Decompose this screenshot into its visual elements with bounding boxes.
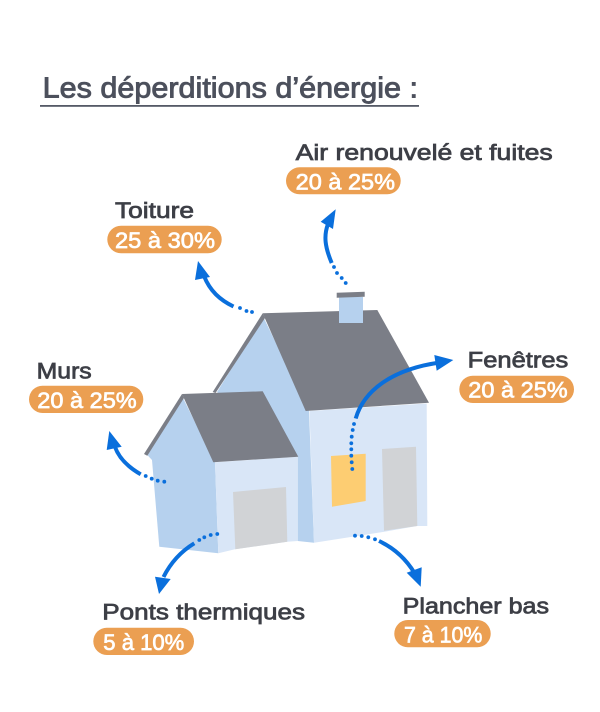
window xyxy=(331,454,366,507)
main house roof edge xyxy=(213,313,265,393)
house illustration xyxy=(144,292,429,553)
annex door xyxy=(233,487,287,549)
main house gable wall xyxy=(217,317,314,543)
arrow: plancher bas xyxy=(353,534,422,587)
arrow: air renouvelé xyxy=(321,209,348,285)
chimney xyxy=(337,292,365,323)
title: Les déperditions d’énergie : xyxy=(43,72,418,104)
main house door xyxy=(382,447,417,531)
label: murs: Murs xyxy=(37,358,92,383)
label: ponts thermiques: 5 à 10% xyxy=(103,630,184,655)
label: murs: 20 à 25% xyxy=(37,388,137,413)
arrow: toiture xyxy=(195,261,254,314)
main house front wall xyxy=(310,404,427,543)
main house roof xyxy=(263,310,429,411)
label: fenêtres: 20 à 25% xyxy=(468,378,568,402)
arrow: murs xyxy=(107,431,166,484)
label: air renouvelé et fuites: 20 à 25% xyxy=(296,169,395,194)
annex roof edge xyxy=(144,394,184,456)
annex roof xyxy=(182,391,298,462)
arrow: fenêtres xyxy=(349,355,453,471)
annex front wall xyxy=(215,457,298,553)
label: toiture xyxy=(107,198,222,253)
annex gable wall xyxy=(147,396,218,553)
label: plancher bas: Plancher bas xyxy=(403,593,549,618)
label: murs xyxy=(29,358,143,413)
label: ponts thermiques: Ponts thermiques xyxy=(102,599,305,624)
label: ponts thermiques xyxy=(93,599,305,655)
label: fenêtres xyxy=(459,347,574,403)
arrow: ponts thermiques xyxy=(155,532,219,594)
label: toiture: Toiture xyxy=(115,198,194,223)
label: air renouvelé et fuites: Air renouvelé et fuites xyxy=(296,140,553,165)
label: fenêtres: Fenêtres xyxy=(468,347,568,372)
label: plancher bas: 7 à 10% xyxy=(404,622,482,647)
label: plancher bas xyxy=(394,593,549,647)
label: air renouvelé et fuites xyxy=(286,140,553,194)
label: toiture: 25 à 30% xyxy=(115,228,215,253)
